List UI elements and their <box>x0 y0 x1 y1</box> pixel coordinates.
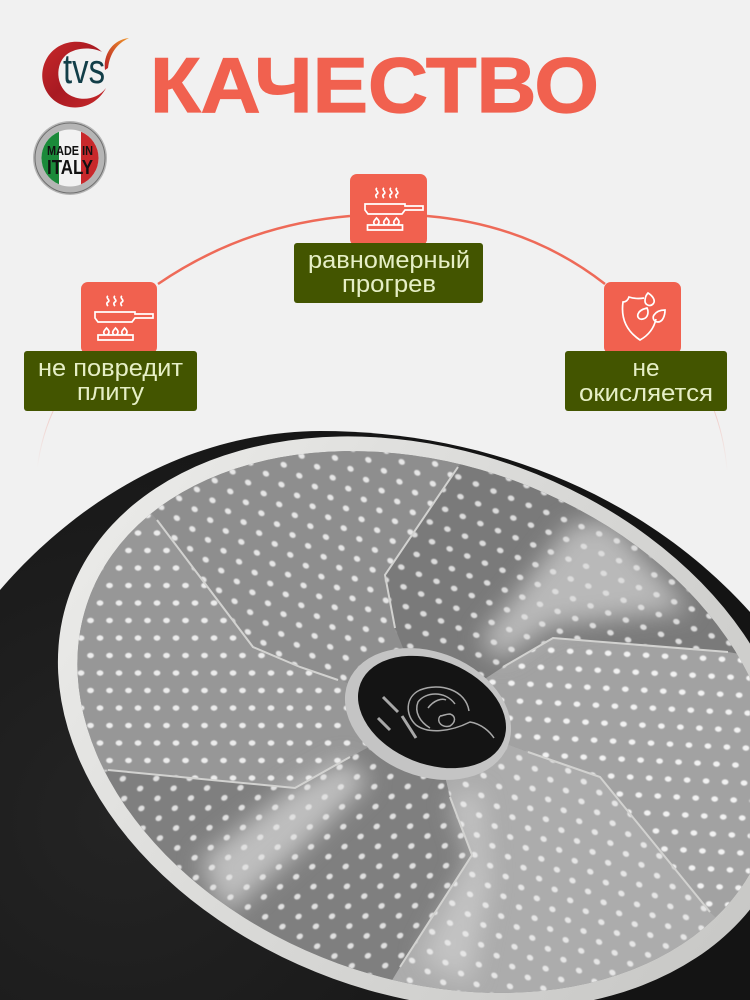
brand mark on hub <box>408 687 494 738</box>
dots <box>78 451 750 993</box>
icon: shield with leaves <box>604 282 681 354</box>
soft highlights <box>200 520 690 985</box>
icon: pan on burner <box>350 174 427 246</box>
sector fills <box>77 514 151 770</box>
label: even heating: прогрев <box>342 271 436 298</box>
badge: made in Italy <box>33 121 107 195</box>
spokes <box>108 467 728 967</box>
label: even heating <box>294 243 483 303</box>
label: does not oxidize: окисляется <box>579 380 713 407</box>
frying pan underside <box>0 400 750 1000</box>
arc connecting the features <box>37 216 727 470</box>
center hub <box>325 624 531 804</box>
base disc with dot texture <box>77 451 750 993</box>
label: does not oxidize <box>565 351 727 411</box>
feature: does not oxidize <box>565 282 727 411</box>
feature: even heating <box>294 174 483 303</box>
label: will not damage stove: плиту <box>77 379 144 406</box>
icon: pan on burner <box>81 282 157 354</box>
label: even heating: равномерный <box>308 247 470 274</box>
title: КАЧЕСТВО <box>150 41 599 129</box>
label: will not damage stove <box>24 351 197 411</box>
feature: will not damage stove <box>24 282 197 411</box>
metal rim <box>0 430 750 1000</box>
pan body <box>0 431 750 1000</box>
label: does not oxidize: не <box>632 355 660 382</box>
badge: made in Italy: MADE IN <box>47 143 93 158</box>
logo: tvs: tvs <box>63 45 105 92</box>
logo: tvs <box>42 38 129 107</box>
badge: made in Italy: ITALY <box>47 157 94 179</box>
label: will not damage stove: не повредит <box>38 355 183 382</box>
